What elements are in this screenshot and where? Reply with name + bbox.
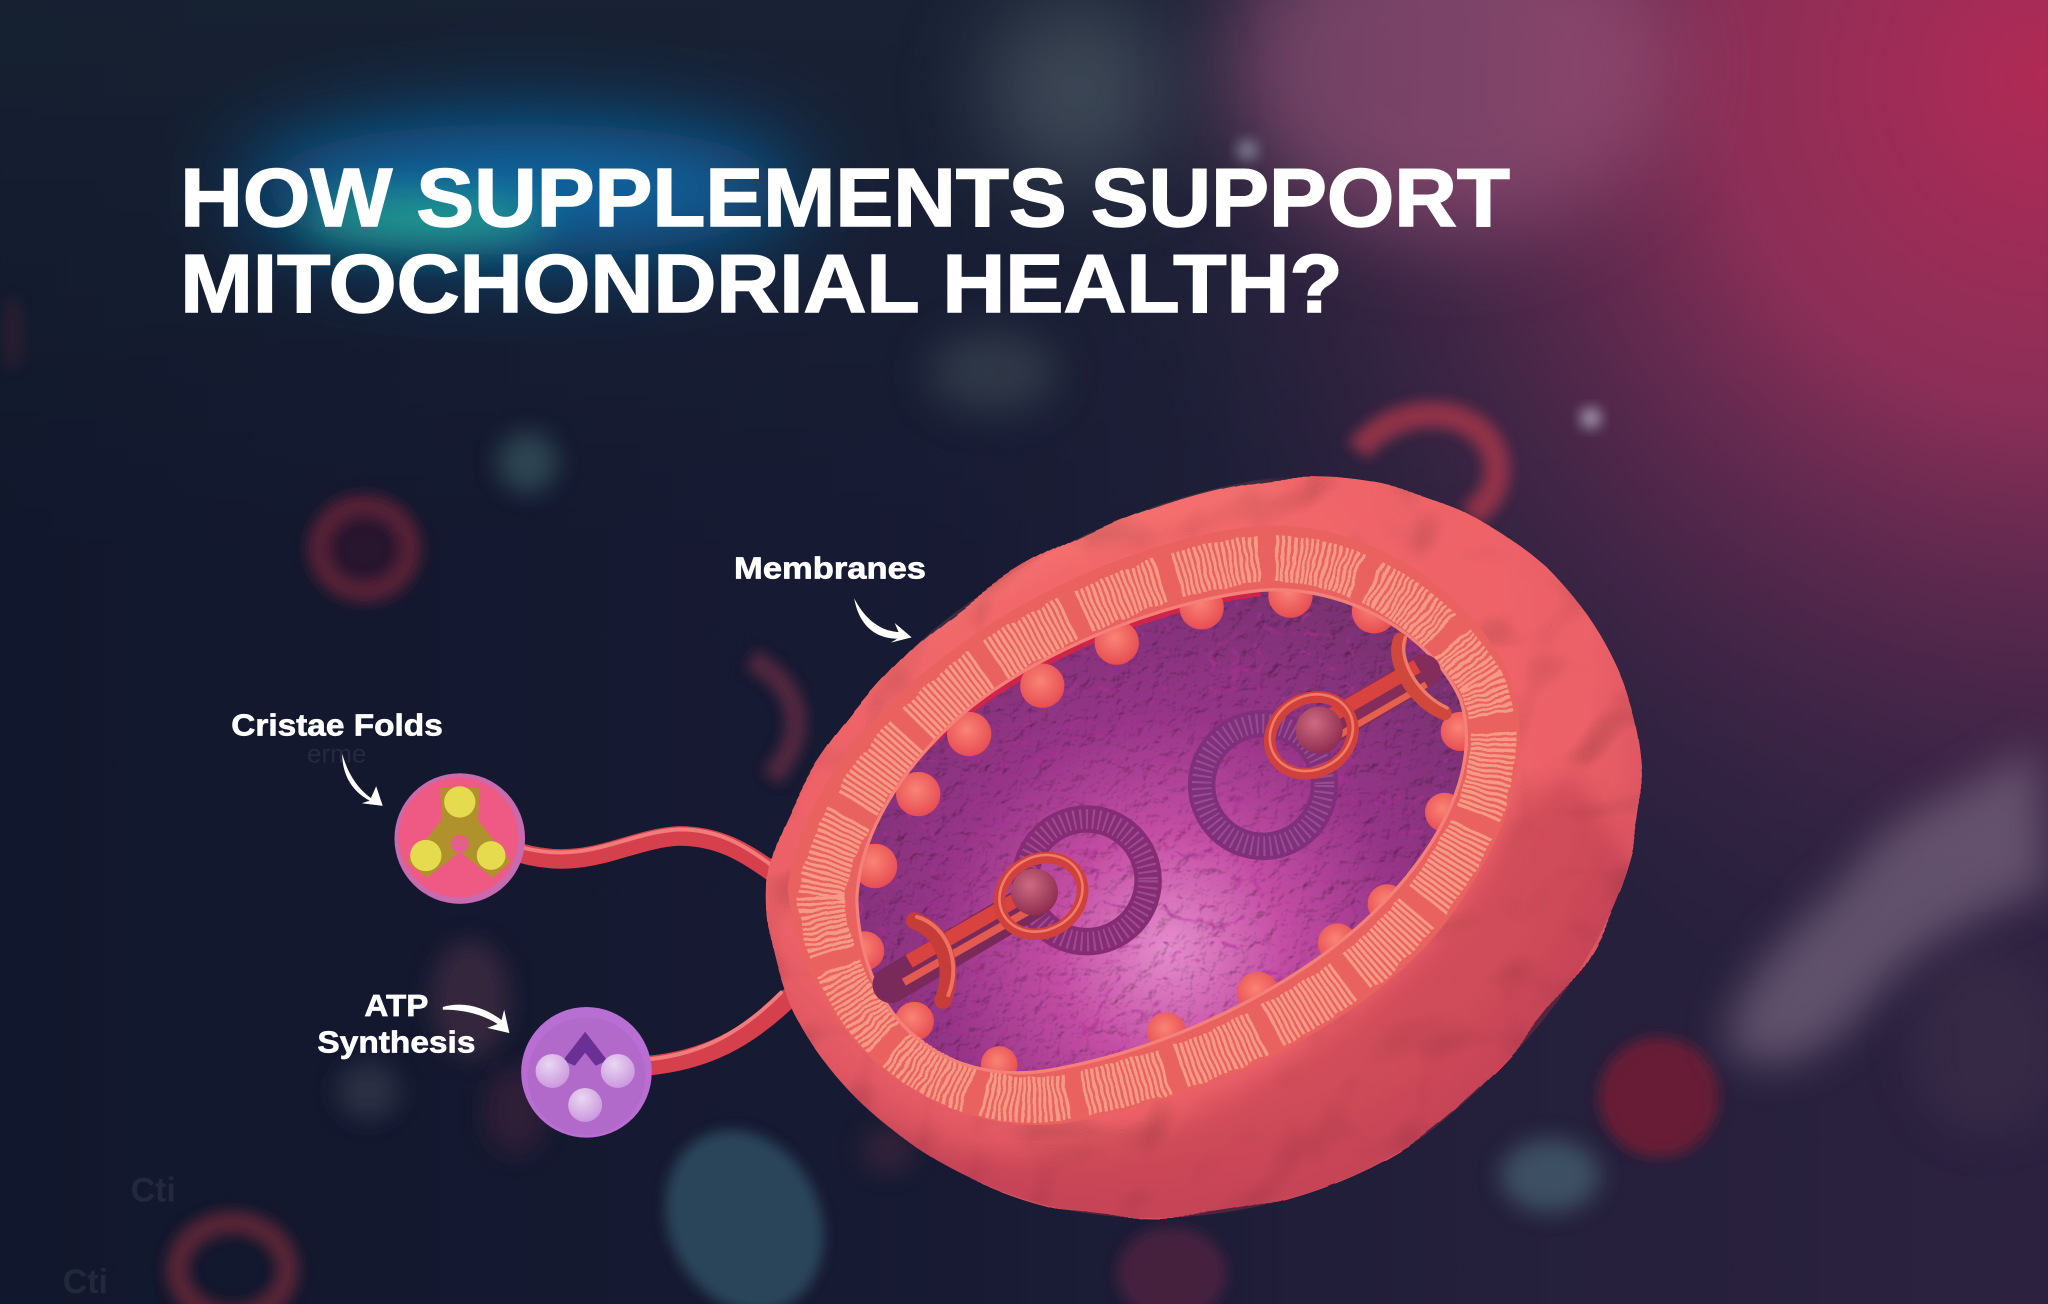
node: ATP synthesis	[521, 1007, 652, 1138]
node: cristae folds	[394, 773, 525, 904]
label: ATP Synthesis: Synthesis	[317, 1025, 475, 1060]
faint ghost lettering: erme	[307, 739, 366, 769]
label: Cristae Folds: Cristae Folds	[231, 707, 443, 742]
faint ghost lettering: Cti	[63, 1263, 108, 1301]
ATP synthase complex: lower	[891, 840, 1097, 1000]
mitochondrion	[767, 476, 1659, 1254]
label: Membranes: Membranes	[734, 551, 926, 586]
cristae ring: lower	[1025, 819, 1148, 942]
arrow: Cristae Folds	[342, 754, 383, 806]
faint ghost lettering: Cti	[131, 1172, 176, 1210]
inner pleated membrane	[788, 525, 1520, 1125]
ATP synthase complex: upper	[1256, 637, 1447, 789]
title: MITOCHONDRIAL HEALTH?	[180, 239, 1343, 330]
connector: cristae node to mitochondrion	[520, 829, 773, 872]
cristae ring: upper	[1202, 724, 1324, 846]
title	[180, 153, 1510, 330]
title: HOW SUPPLEMENTS SUPPORT	[180, 153, 1510, 244]
inner membrane bumps	[860, 591, 1465, 1072]
outer membrane	[767, 476, 1659, 1254]
arrow: ATP Synthesis	[443, 1005, 509, 1033]
faint ghost lettering	[63, 739, 366, 1301]
arrow: Membranes	[854, 598, 912, 643]
inner matrix	[858, 592, 1464, 1072]
label: ATP Synthesis	[317, 988, 475, 1060]
label: ATP Synthesis: ATP	[364, 988, 428, 1023]
connector: ATP node to mitochondrion	[647, 993, 789, 1066]
